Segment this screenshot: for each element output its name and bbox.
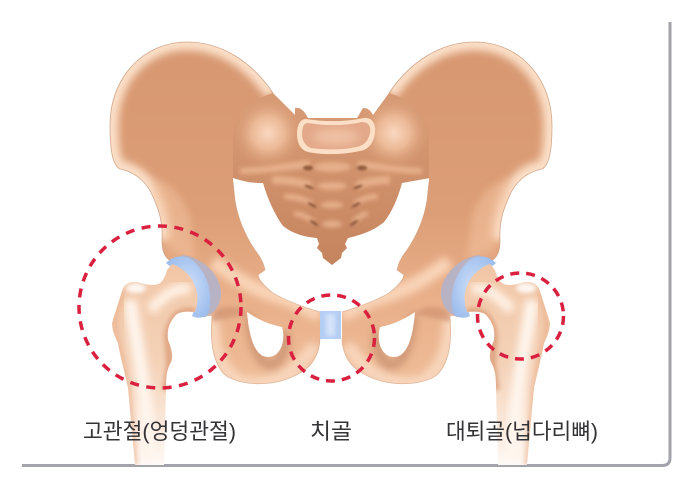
left sacral ala highlight	[241, 107, 295, 162]
sacrum	[232, 93, 430, 265]
left femur and hip joint cartilage	[112, 255, 221, 465]
label: hip joint: 고관절(엉덩관절)	[83, 419, 236, 444]
sacrum endplate ring	[297, 118, 375, 154]
right femur and hip joint cartilage	[441, 255, 550, 465]
right hip bone	[342, 42, 552, 384]
label: pubis: 치골	[310, 419, 352, 444]
right sacral ala highlight	[370, 107, 421, 162]
dashed circle: hip joint	[79, 226, 241, 388]
dashed circle: femur head	[478, 273, 564, 359]
pubic symphysis cartilage	[320, 311, 341, 339]
dashed circle: pubis	[288, 295, 374, 381]
left hip bone	[110, 42, 320, 384]
label: femur: 대퇴골(넙다리뼈)	[446, 419, 598, 444]
